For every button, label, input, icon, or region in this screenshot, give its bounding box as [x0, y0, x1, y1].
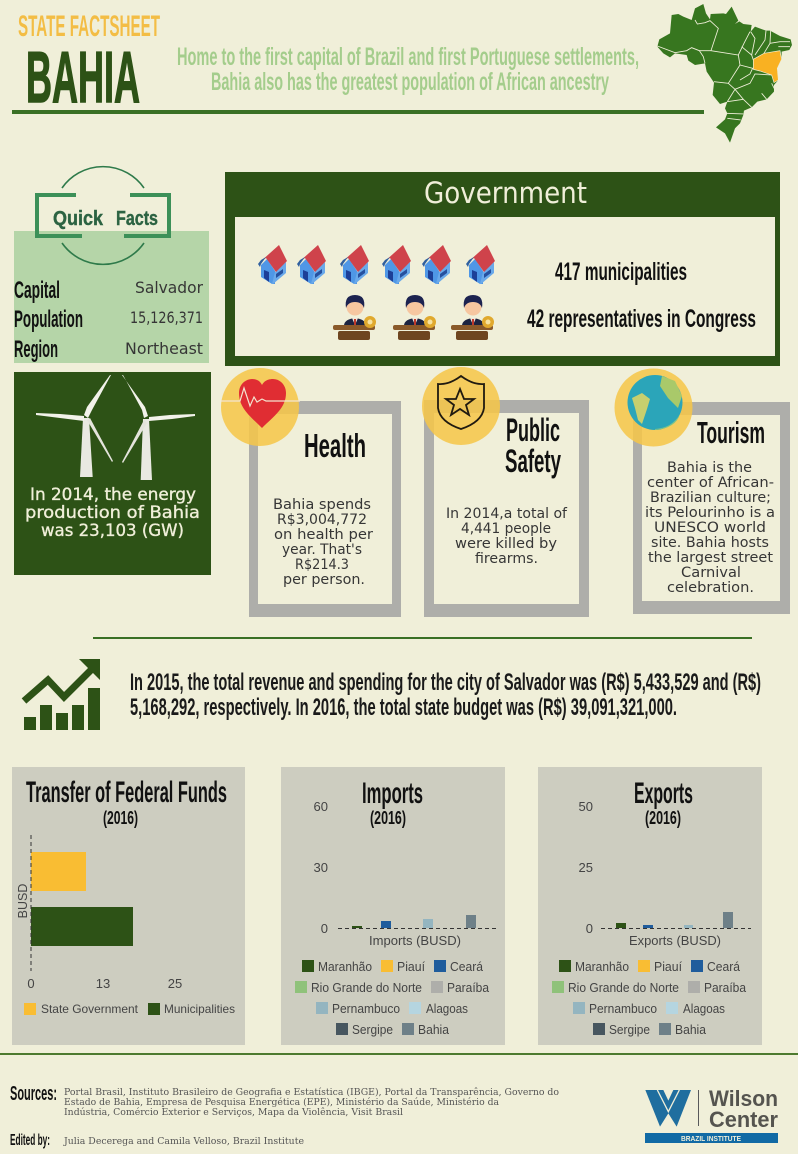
- icon: growth chart: [24, 659, 100, 730]
- legend: Municipalities: [164, 1002, 235, 1016]
- tourism text: [645, 460, 775, 596]
- imports legend: Alagoas: [426, 1002, 468, 1016]
- imports y axis: 0: [321, 921, 328, 936]
- fact row: capital: [14, 277, 203, 304]
- quick facts badge: [37, 167, 169, 264]
- chart heading: Transfer of Federal Funds: [26, 776, 227, 809]
- imports heading: [362, 777, 423, 828]
- imports legend: Pernambuco: [332, 1002, 400, 1016]
- quick facts heading: [53, 208, 158, 230]
- logo: Wilson Center: Center: [709, 1107, 778, 1132]
- sources label: Sources:: [10, 1083, 57, 1105]
- exports y axis: 25: [579, 860, 593, 875]
- editors text: Julia Decerega and Camila Velloso, Brazil Institute: [63, 1137, 304, 1147]
- imports y axis: [314, 799, 328, 936]
- exports axis title: Exports (BUSD): [629, 933, 721, 948]
- logo: Wilson Center: Wilson: [709, 1086, 778, 1111]
- exports legend: [552, 960, 746, 1037]
- panel: public safety: [422, 367, 589, 617]
- panel: imports: [281, 767, 505, 1045]
- legend: State Government: [41, 1002, 139, 1016]
- exports legend: Paraíba: [704, 981, 746, 995]
- exports heading: (2016): [645, 808, 681, 828]
- bar: state government: [31, 852, 86, 891]
- title: Bahia: BAHIA: [26, 38, 140, 118]
- imports legend: Bahia: [418, 1023, 449, 1037]
- public safety heading: Safety: [505, 443, 561, 479]
- exports legend: Alagoas: [683, 1002, 725, 1016]
- edited by label: Edited by:: [10, 1132, 50, 1149]
- quick facts heading: Facts: [116, 208, 158, 230]
- public safety text: firearms.: [475, 551, 538, 567]
- fact row: capital: Capital: [14, 277, 60, 304]
- fact row: population: [14, 306, 203, 333]
- exports heading: Exports: [634, 777, 693, 810]
- exports legend: Sergipe: [609, 1023, 650, 1037]
- health text: R$3,004,772: [277, 512, 367, 528]
- public safety text: [446, 506, 568, 567]
- fact row: region: Northeast: [125, 339, 203, 358]
- exports legend: Ceará: [707, 960, 740, 974]
- health text: Bahia spends: [273, 497, 371, 513]
- panel: energy: [14, 372, 211, 575]
- chart heading: [26, 776, 227, 828]
- public safety text: were killed by: [455, 536, 557, 552]
- icon: globe: [614, 368, 692, 446]
- exports y axis: 50: [579, 799, 593, 814]
- municipalities stat: 417 municipalities: [555, 258, 687, 286]
- tourism text: UNESCO world: [654, 520, 766, 536]
- tourism text: center of African-: [647, 475, 774, 491]
- imports y axis: 60: [314, 799, 328, 814]
- bar: municipalities: [31, 907, 133, 946]
- imports axis title: Imports (BUSD): [369, 933, 461, 948]
- axis labels: [16, 884, 182, 991]
- public safety heading: Public: [506, 412, 560, 448]
- imports legend: Ceará: [450, 960, 483, 974]
- icons: three representatives: [333, 295, 494, 340]
- fact row: population: Population: [14, 306, 83, 333]
- imports bars: [352, 915, 476, 928]
- tourism text: site. Bahia hosts: [651, 535, 769, 551]
- exports legend: Bahia: [675, 1023, 706, 1037]
- imports heading: Imports: [362, 777, 423, 810]
- exports legend: Piauí: [654, 960, 683, 974]
- tourism text: the largest street: [648, 550, 774, 566]
- panel: transfer of federal funds: [12, 767, 245, 1045]
- icons: six houses: [258, 245, 495, 284]
- health heading: Health: [304, 427, 366, 464]
- sources text: Indústria, Comércio Exterior e Serviços, Mapa da Violência, Visit Brasil: [64, 1107, 403, 1118]
- tourism text: Bahia is the: [667, 460, 752, 476]
- imports legend: Maranhão: [318, 960, 372, 974]
- panel: health: [221, 368, 401, 617]
- government heading: Government: [424, 176, 587, 210]
- public safety text: 4,441 people: [461, 521, 551, 537]
- health text: per person.: [283, 572, 365, 588]
- exports y axis: [579, 799, 593, 936]
- public safety heading: [505, 412, 561, 479]
- axis labels: 25: [168, 976, 182, 991]
- public safety text: In 2014,a total of: [446, 506, 568, 522]
- exports legend: Maranhão: [575, 960, 629, 974]
- sources text: Portal Brasil, Instituto Brasileiro de Geografia e Estatística (IBGE), Portal da Transparência, Governo do: [64, 1087, 559, 1098]
- panel: tourism: [614, 368, 790, 614]
- imports y axis: 30: [314, 860, 328, 875]
- quick facts heading: Quick: [53, 208, 104, 230]
- fact row: region: Region: [14, 336, 58, 363]
- icon: wind turbines: [36, 375, 195, 480]
- exports y axis: 0: [586, 921, 593, 936]
- imports legend: Sergipe: [352, 1023, 393, 1037]
- fact row: region: [14, 336, 203, 363]
- icon: heart: [221, 368, 300, 446]
- map of Brazil with Bahia highlighted: [657, 4, 792, 143]
- tourism text: Brazilian culture;: [650, 490, 771, 506]
- panel: exports: [538, 767, 762, 1045]
- health text: R$214.3: [295, 557, 349, 573]
- axis labels: 0: [27, 976, 35, 991]
- budget text: [130, 669, 761, 721]
- tourism text: Carnival: [681, 565, 741, 581]
- logo: Wilson Center: [645, 1086, 778, 1143]
- imports legend: Paraíba: [447, 981, 489, 995]
- health text: [273, 497, 373, 588]
- fact row: capital: Salvador: [135, 278, 203, 297]
- exports bars: [616, 912, 733, 928]
- axis labels: BUSD: [16, 884, 30, 918]
- health text: year. That's: [282, 542, 362, 558]
- imports legend: Rio Grande do Norte: [311, 981, 422, 995]
- panel: government: [225, 172, 780, 366]
- header label: state factsheet: STATE FACTSHEET: [18, 10, 160, 43]
- imports legend: [295, 960, 489, 1037]
- header rule: [12, 110, 704, 114]
- axis labels: 13: [96, 976, 110, 991]
- energy text: In 2014, the energy: [30, 485, 196, 505]
- fact row: population: 15,126,371: [130, 308, 203, 327]
- chart heading: (2016): [103, 808, 138, 828]
- panel: quick facts: [14, 167, 209, 363]
- energy text: [25, 485, 200, 541]
- exports legend: Pernambuco: [589, 1002, 657, 1016]
- energy text: production of Bahia: [25, 503, 200, 523]
- energy text: was 23,103 (GW): [41, 521, 184, 541]
- sources text: [64, 1087, 559, 1118]
- sources text: Estado de Bahia, Empresa de Pesquisa Energética (EPE), Ministério da Saúde, Ministério da: [64, 1097, 500, 1108]
- tourism text: its Pelourinho is a: [645, 505, 775, 521]
- imports legend: Piauí: [397, 960, 426, 974]
- exports legend: Rio Grande do Norte: [568, 981, 679, 995]
- health text: on health per: [274, 527, 373, 543]
- imports heading: (2016): [370, 808, 406, 828]
- icon: shield: [422, 367, 500, 445]
- subtitle: [177, 43, 639, 96]
- legend: [24, 1002, 235, 1016]
- exports heading: [634, 777, 693, 828]
- logo: Wilson Center: BRAZIL INSTITUTE: [681, 1136, 741, 1143]
- tourism text: celebration.: [667, 580, 754, 596]
